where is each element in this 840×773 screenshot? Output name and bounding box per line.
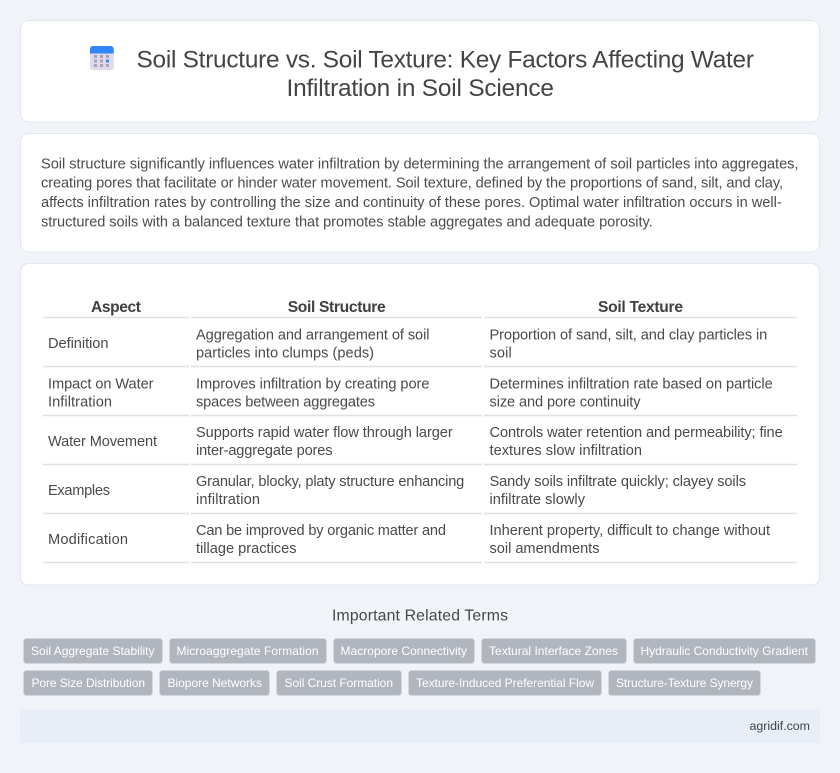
row: water movement: textures slow infiltration — [490, 443, 642, 459]
footer bar: agridif.com — [750, 719, 810, 733]
row: modification: soil amendments — [490, 541, 600, 557]
tag: microaggregate formation: Microaggregate Formation — [176, 644, 318, 658]
row: modification: Modification — [48, 532, 128, 548]
row: water movement: Supports rapid water flow through larger — [196, 425, 453, 441]
tag: microaggregate formation — [170, 638, 326, 664]
tag: textural interface zones — [482, 638, 626, 664]
row: definition: Definition — [48, 336, 108, 352]
row: definition: soil — [490, 345, 512, 361]
row: impact on water infiltration: Determines infiltration rate based on particle — [490, 376, 773, 392]
table header — [91, 299, 683, 316]
row: definition: particles into clumps (peds) — [196, 345, 374, 361]
footer bar — [20, 710, 820, 743]
row: impact on water infiltration: spaces between aggregates — [196, 394, 375, 410]
tag: texture-induced preferential flow: Texture-Induced Preferential Flow — [416, 676, 594, 690]
tag: biopore networks — [160, 670, 270, 696]
title text: Infiltration in Soil Science — [286, 75, 554, 102]
paragraph text: Soil structure significantly influences water infiltration by determining the arrangement of soil particles into aggregates, — [41, 156, 798, 172]
tag: soil crust formation: Soil Crust Formation — [284, 676, 393, 690]
tag: pore size distribution — [24, 670, 152, 696]
paragraph text — [41, 156, 798, 231]
title text — [136, 46, 754, 102]
tag: hydraulic conductivity gradient: Hydraulic Conductivity Gradient — [640, 644, 809, 658]
tag: soil crust formation — [276, 670, 402, 696]
paragraph text: structured soils with a balanced texture that promotes stable aggregates and adequate porosity. — [41, 215, 653, 231]
row: examples: infiltrate slowly — [490, 492, 586, 508]
row: examples: Sandy soils infiltrate quickly; clayey soils — [490, 474, 746, 490]
row: impact on water infiltration: Infiltration — [48, 394, 112, 410]
table header: Soil Texture — [598, 299, 683, 316]
panel: title header — [20, 20, 820, 122]
tag: textural interface zones: Textural Interface Zones — [489, 644, 618, 658]
row: definition: Proportion of sand, silt, and clay particles in — [490, 327, 767, 343]
tag: macropore connectivity — [334, 638, 474, 664]
tag: soil aggregate stability — [24, 638, 162, 664]
heading: important related terms: Important Related Terms — [332, 608, 508, 625]
row: water movement: Water Movement — [48, 434, 157, 450]
row: modification — [48, 523, 770, 557]
tag: soil aggregate stability: Soil Aggregate Stability — [31, 644, 154, 658]
row: impact on water infiltration — [48, 376, 773, 410]
tag: texture-induced preferential flow — [408, 670, 602, 696]
row: definition — [48, 327, 767, 361]
row: examples: Granular, blocky, platy structure enhancing — [196, 474, 464, 490]
row: impact on water infiltration: Impact on Water — [48, 376, 154, 392]
tag: pore size distribution: Pore Size Distribution — [32, 676, 145, 690]
tag: hydraulic conductivity gradient — [634, 638, 816, 664]
table header: Aspect — [91, 299, 141, 316]
panel: intro paragraph — [20, 134, 820, 252]
title text: Soil Structure vs. Soil Texture: Key Factors Affecting Water — [136, 46, 754, 74]
tag: structure-texture synergy — [608, 670, 760, 696]
tag: biopore networks: Biopore Networks — [168, 676, 262, 690]
tag: macropore connectivity: Macropore Connectivity — [340, 644, 467, 658]
row: impact on water infiltration: size and pore continuity — [490, 394, 641, 410]
row: water movement: inter-aggregate pores — [196, 443, 332, 459]
row: modification: Can be improved by organic matter and — [196, 523, 446, 539]
row: water movement — [48, 425, 783, 459]
row: water movement: Controls water retention and permeability; fine — [490, 425, 783, 441]
icon: calendar — [90, 46, 114, 70]
related term tags — [24, 638, 816, 696]
paragraph text: affects infiltration rates by controlling the size and continuity of these pores. Optimal water infiltration occurs in well- — [41, 195, 782, 211]
paragraph text: creating pores that facilitate or hinder water movement. Soil texture, defined by the proportions of sand, silt, and clay, — [41, 176, 783, 192]
tag: structure-texture synergy: Structure-Texture Synergy — [616, 676, 753, 690]
row: examples — [48, 474, 746, 508]
row: examples: infiltration — [196, 492, 260, 508]
row: impact on water infiltration: Improves infiltration by creating pore — [196, 376, 430, 392]
row: modification: Inherent property, difficult to change without — [490, 523, 770, 539]
row: modification: tillage practices — [196, 541, 296, 557]
panel: comparison table — [20, 264, 820, 585]
table header: Soil Structure — [288, 299, 386, 316]
row: examples: Examples — [48, 483, 110, 499]
row: definition: Aggregation and arrangement of soil — [196, 327, 430, 343]
